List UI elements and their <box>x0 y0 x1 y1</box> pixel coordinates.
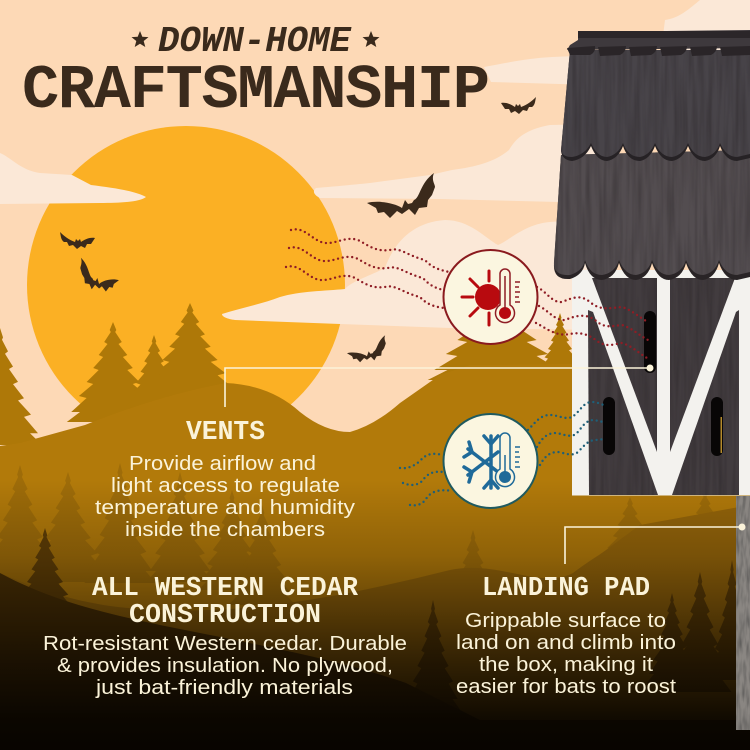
bat: large <box>367 173 435 218</box>
sun <box>27 126 345 444</box>
body: vents: light access to regulate <box>111 475 340 497</box>
body: landing pad <box>456 610 676 698</box>
dark front hill <box>0 573 750 750</box>
mid hill <box>0 505 750 750</box>
text block: cedar construction <box>43 574 407 699</box>
top shingle row <box>567 46 750 56</box>
icon: snowflake and thermometer <box>444 414 538 508</box>
heading: landing pad: LANDING PAD <box>482 574 650 604</box>
title <box>22 21 490 126</box>
callout line: landing pad <box>565 524 746 564</box>
vent: lower left <box>603 397 615 455</box>
clouds <box>0 0 750 330</box>
body: cedar construction: Rot-resistant Western cedar. Durable <box>43 633 407 655</box>
main title: CRAFTSMANSHIP <box>22 55 490 126</box>
mid trees <box>0 463 734 630</box>
heat airflow lines <box>286 229 648 358</box>
heading: cedar construction: CONSTRUCTION <box>129 601 321 631</box>
heading: cedar construction <box>92 574 359 631</box>
body: landing pad: Grippable surface to <box>465 610 666 632</box>
subtitle: DOWN-HOME <box>158 21 352 62</box>
body: landing pad: easier for bats to roost <box>456 676 676 698</box>
roof ridge <box>567 30 750 50</box>
heading: vents: VENTS <box>186 418 265 448</box>
roof <box>554 30 750 280</box>
body: landing pad: the box, making it <box>479 654 653 676</box>
vent: lower right <box>711 397 723 456</box>
lower shingles shadow <box>554 150 750 280</box>
panel: lower right <box>672 310 739 495</box>
upper shingles shadow <box>561 50 750 161</box>
main hill <box>0 362 750 750</box>
house body <box>572 270 750 496</box>
landing pad post <box>736 496 750 730</box>
lower shingles <box>554 150 750 275</box>
vent: upper <box>644 311 656 373</box>
callout line: vents <box>225 364 654 407</box>
forest hills <box>0 280 750 750</box>
bat: on sun upper <box>60 232 95 249</box>
panel: upper right <box>670 278 735 452</box>
dusk gradient <box>0 480 750 750</box>
body: vents: Provide airflow and <box>129 453 316 475</box>
body: landing pad: land on and climb into <box>456 632 676 654</box>
bat: top right <box>501 97 536 114</box>
bat: lower centre <box>347 335 386 362</box>
bat: on sun lower <box>80 258 119 292</box>
dark trees <box>14 528 750 710</box>
panel: upper left <box>592 278 657 452</box>
text block: landing pad <box>456 574 676 698</box>
body: cedar construction: & provides insulation. No plywood, <box>57 655 393 677</box>
text block: vents <box>95 418 355 541</box>
star right <box>362 31 380 47</box>
bat house <box>554 30 750 496</box>
heading: cedar construction: ALL WESTERN CEDAR <box>92 574 359 604</box>
body: vents: temperature and humidity <box>95 497 355 519</box>
body: cedar construction: just bat-friendly materials <box>95 677 353 699</box>
upper shingles <box>561 50 750 157</box>
body: cedar construction <box>43 633 407 699</box>
star left <box>132 31 148 47</box>
panel: lower left <box>588 310 658 495</box>
cold airflow lines <box>400 402 607 505</box>
icon: sun and thermometer <box>444 250 538 344</box>
body: vents <box>95 453 355 541</box>
treeline trees <box>0 280 581 445</box>
body: vents: inside the chambers <box>125 519 325 541</box>
